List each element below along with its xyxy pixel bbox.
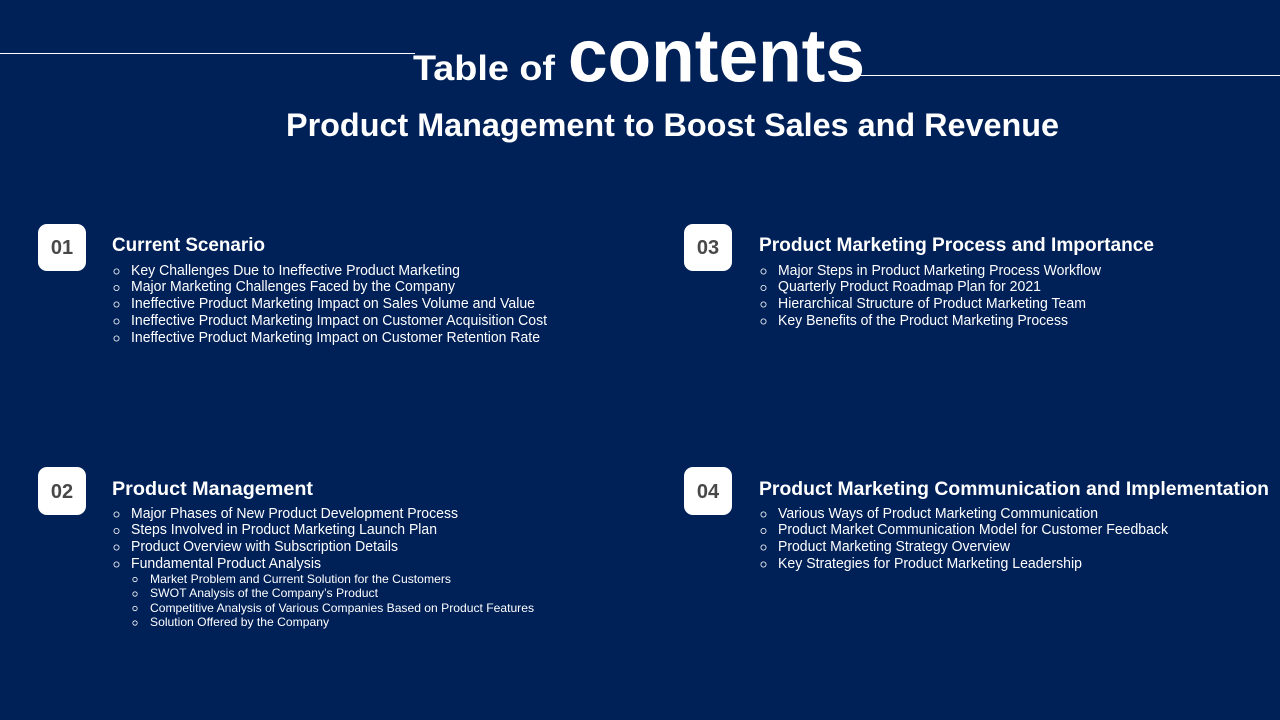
- panel: section 03 process and importance: [684, 224, 1154, 329]
- panel: section 01 current scenario: [38, 224, 547, 346]
- heading: current scenario: Current Scenario: [112, 235, 265, 256]
- heading: process and importance: Product Marketing Process and Importance: [759, 235, 1154, 256]
- list: product management topics: [114, 506, 458, 572]
- sub-list: fundamental product analysis: Market Problem and Current Solution for the Customers: [150, 572, 451, 586]
- list: current scenario topics: Ineffective Product Marketing Impact on Sales Volume and Value: [131, 296, 535, 312]
- list: communication topics: Various Ways of Product Marketing Communication: [778, 506, 1098, 522]
- sub-list: fundamental product analysis: SWOT Analysis of the Company’s Product: [150, 586, 379, 600]
- panel: section 02 product management: [38, 467, 534, 629]
- list: process topics: [761, 263, 1101, 329]
- list: product management topics: Fundamental Product Analysis: [131, 556, 321, 572]
- list: communication topics: [761, 506, 1169, 572]
- list: communication topics: Key Strategies for Product Marketing Leadership: [778, 556, 1082, 572]
- list: process topics: Major Steps in Product Marketing Process Workflow: [778, 263, 1101, 279]
- title: contents: [568, 14, 865, 98]
- number badge 04: 04: [697, 481, 720, 503]
- heading: communication and implementation: Product Marketing Communication and Implementation: [759, 479, 1269, 500]
- list: current scenario topics: Ineffective Product Marketing Impact on Customer Acquisition Cost: [131, 313, 547, 329]
- number badge 01: [38, 224, 86, 271]
- subtitle: Product Management to Boost Sales and Revenue: [286, 107, 1059, 143]
- list: communication topics: Product Market Communication Model for Customer Feedback: [778, 522, 1169, 538]
- list: current scenario topics: Key Challenges Due to Ineffective Product Marketing: [131, 263, 460, 279]
- list: process topics: Hierarchical Structure of Product Marketing Team: [778, 296, 1086, 312]
- number badge 01: 01: [51, 237, 73, 259]
- list: product management topics: Steps Involved in Product Marketing Launch Plan: [131, 522, 437, 538]
- list: current scenario topics: [114, 263, 547, 346]
- list: current scenario topics: Major Marketing Challenges Faced by the Company: [131, 279, 456, 295]
- number badge 03: 03: [697, 237, 719, 259]
- number badge 03: [684, 224, 732, 271]
- number badge 02: [38, 467, 86, 515]
- title: Table of: [413, 49, 555, 88]
- title: [413, 14, 865, 98]
- list: product management topics: Major Phases of New Product Development Process: [131, 506, 458, 522]
- number badge 02: 02: [51, 481, 73, 503]
- list: process topics: Quarterly Product Roadmap Plan for 2021: [778, 279, 1041, 295]
- number badge 04: [684, 467, 732, 515]
- sub-list: fundamental product analysis: Competitive Analysis of Various Companies Based on Product Features: [150, 601, 534, 615]
- list: product management topics: Product Overview with Subscription Details: [131, 539, 398, 555]
- list: communication topics: Product Marketing Strategy Overview: [778, 539, 1011, 555]
- list: current scenario topics: Ineffective Product Marketing Impact on Customer Retention Rate: [131, 330, 540, 346]
- sub-list: fundamental product analysis: Solution Offered by the Company: [150, 615, 329, 629]
- panel: section 04 communication and implementation: [684, 467, 1269, 572]
- sub-list: fundamental product analysis: [133, 572, 534, 629]
- heading: product management: Product Management: [112, 479, 314, 500]
- list: process topics: Key Benefits of the Product Marketing Process: [778, 313, 1068, 329]
